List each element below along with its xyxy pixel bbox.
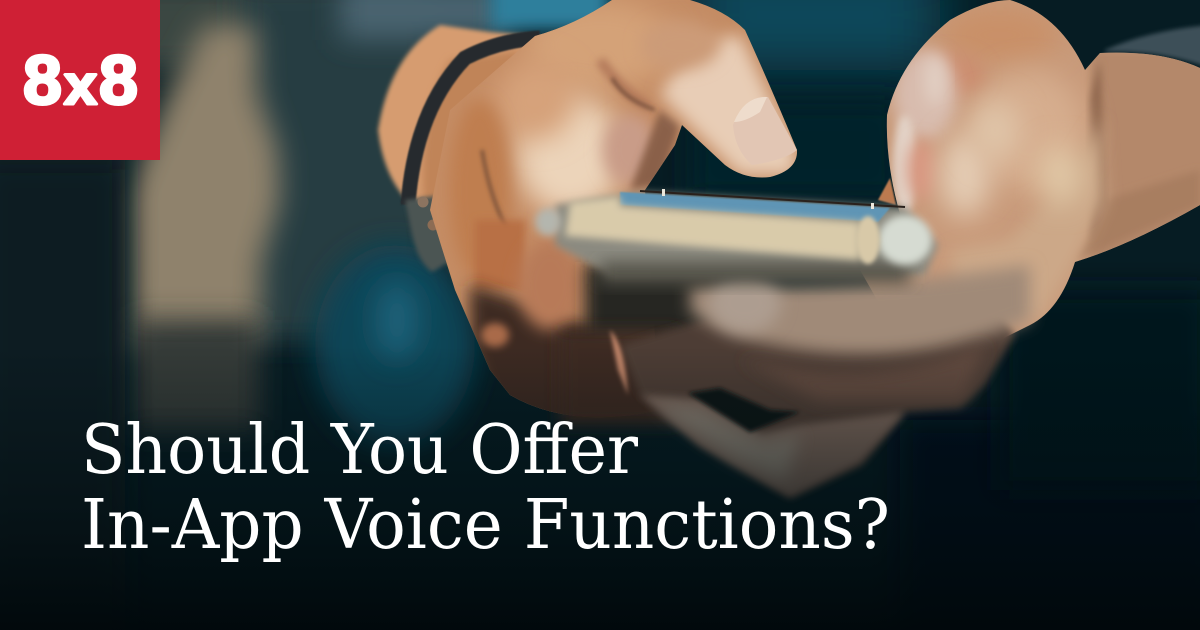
icon: thumbnail — [764, 97, 797, 156]
icon: bracelet buckle — [405, 196, 449, 272]
logo: 8x8: 8 — [99, 41, 138, 119]
title line 2: In-App Voice Functions? — [81, 486, 890, 565]
icon: bracelet strap — [408, 38, 540, 205]
thumb webbing sliver — [878, 178, 896, 205]
fingers under the phone — [560, 262, 1030, 498]
logo: 8x8: 8 — [23, 41, 62, 119]
logo: 8x8 — [0, 0, 160, 160]
title — [81, 411, 890, 565]
wrist and bracelet — [378, 25, 540, 300]
title line 1: Should You Offer — [81, 411, 638, 490]
logo: 8x8: x — [64, 53, 97, 116]
left hand with pointing thumb — [430, 0, 798, 418]
phone — [535, 189, 938, 284]
right hand and forearm — [862, 0, 1200, 336]
